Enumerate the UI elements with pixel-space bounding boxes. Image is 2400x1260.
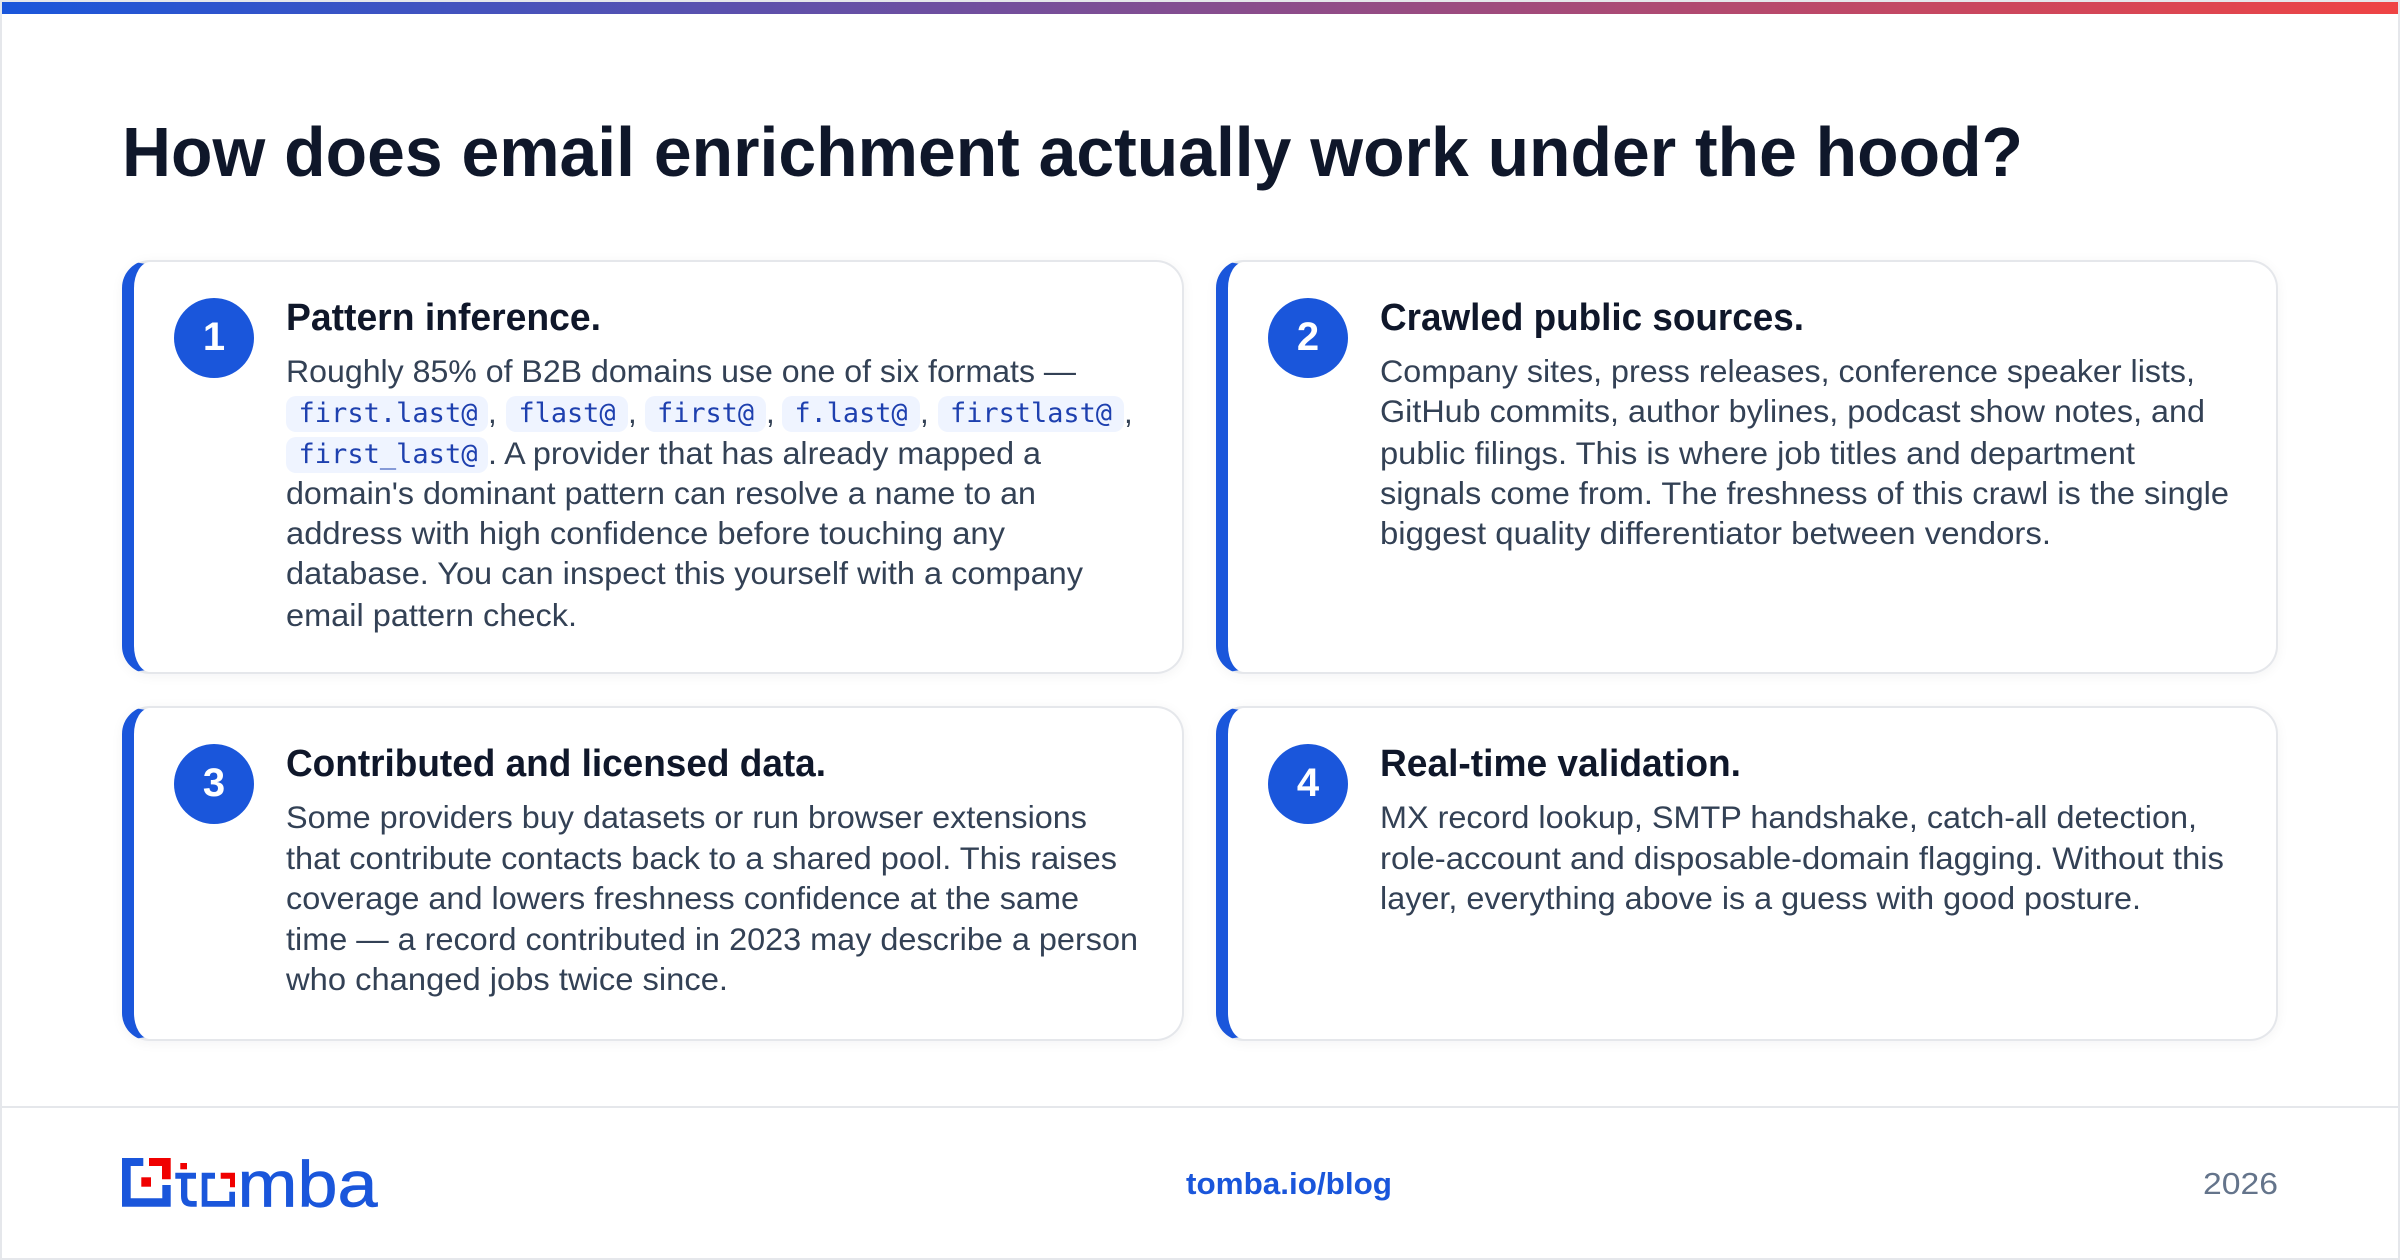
- title: How does email enrichment actually work under the hood?: [122, 113, 2023, 191]
- body text: pattern inference: address with high confidence before touching any: [286, 515, 1005, 551]
- step number 3: [174, 744, 254, 824]
- body text: crawled public sources: public filings. This is where job titles and department: [1380, 435, 2135, 471]
- step number 3: 3: [203, 761, 225, 805]
- step number 1: [174, 298, 254, 378]
- body text: crawled public sources: [1380, 353, 2229, 551]
- body text: contributed and licensed data: coverage and lowers freshness confidence at the same: [286, 880, 1079, 916]
- body text: real-time validation: [1380, 799, 2224, 916]
- heading: pattern inference: Pattern inference.: [286, 297, 601, 339]
- body text: pattern inference: ,: [628, 394, 637, 430]
- step number 4: 4: [1297, 761, 1320, 805]
- body text: pattern inference: first@: [657, 398, 754, 429]
- body text: pattern inference: ,: [920, 394, 929, 430]
- step number 2: 2: [1297, 315, 1319, 359]
- body text: real-time validation: role-account and disposable-domain flagging. Without this: [1380, 840, 2224, 876]
- heading: crawled public sources: Crawled public sources.: [1380, 297, 1804, 339]
- body text: pattern inference: ,: [1124, 394, 1133, 430]
- panel: pattern inference: [122, 260, 1184, 674]
- body text: pattern inference: firstlast@: [950, 398, 1112, 429]
- body text: crawled public sources: signals come from. The freshness of this crawl is the single: [1380, 475, 2229, 511]
- heading: real-time validation: Real-time validation.: [1380, 743, 1741, 785]
- panel: contributed and licensed data: [122, 706, 1184, 1041]
- body text: pattern inference: domain's dominant pattern can resolve a name to an: [286, 475, 1036, 511]
- heading: contributed and licensed data: Contributed and licensed data.: [286, 743, 826, 785]
- body text: real-time validation: layer, everything above is a guess with good posture.: [1380, 880, 2141, 916]
- footer year: 2026: [2203, 1166, 2278, 1201]
- step number 4: [1268, 744, 1348, 824]
- body text: pattern inference: [286, 353, 1133, 633]
- logo letters mba: mba: [238, 1148, 378, 1221]
- body text: crawled public sources: GitHub commits, author bylines, podcast show notes, and: [1380, 393, 2205, 429]
- body text: pattern inference: f.last@: [794, 398, 908, 429]
- footer logo: tomba: [122, 1148, 378, 1221]
- panel: real-time validation: [1216, 706, 2278, 1041]
- footer divider: [2, 1106, 2398, 1108]
- logo mark: [122, 1158, 171, 1207]
- logo letters t and o: [175, 1163, 235, 1207]
- body text: pattern inference: email pattern check.: [286, 597, 577, 633]
- body text: pattern inference: first_last@: [298, 439, 478, 470]
- body text: contributed and licensed data: time — a record contributed in 2023 may describe a person: [286, 921, 1138, 957]
- body text: pattern inference: . A provider that has already mapped a: [488, 435, 1041, 471]
- body text: crawled public sources: Company sites, press releases, conference speaker lists,: [1380, 353, 2195, 389]
- body text: contributed and licensed data: who changed jobs twice since.: [285, 961, 728, 997]
- body text: pattern inference: ,: [766, 394, 775, 430]
- body text: pattern inference: first.last@: [298, 398, 478, 429]
- body text: contributed and licensed data: [285, 799, 1138, 997]
- body text: crawled public sources: biggest quality differentiator between vendors.: [1380, 515, 2051, 551]
- body text: pattern inference: Roughly 85% of B2B domains use one of six formats —: [286, 353, 1076, 389]
- footer link: tomba.io/blog: [1186, 1166, 1392, 1201]
- body text: pattern inference: ,: [488, 394, 497, 430]
- body text: real-time validation: MX record lookup, SMTP handshake, catch-all detection,: [1380, 799, 2197, 835]
- step number 2: [1268, 298, 1348, 378]
- body text: pattern inference: flast@: [518, 398, 616, 429]
- body text: contributed and licensed data: that contribute contacts back to a shared pool. This raises: [286, 840, 1117, 876]
- step number 1: 1: [203, 315, 225, 359]
- body text: contributed and licensed data: Some providers buy datasets or run browser extensions: [286, 799, 1087, 835]
- body text: pattern inference: database. You can inspect this yourself with a company: [286, 555, 1083, 591]
- top gradient bar: [2, 2, 2398, 14]
- panel: crawled public sources: [1216, 260, 2278, 674]
